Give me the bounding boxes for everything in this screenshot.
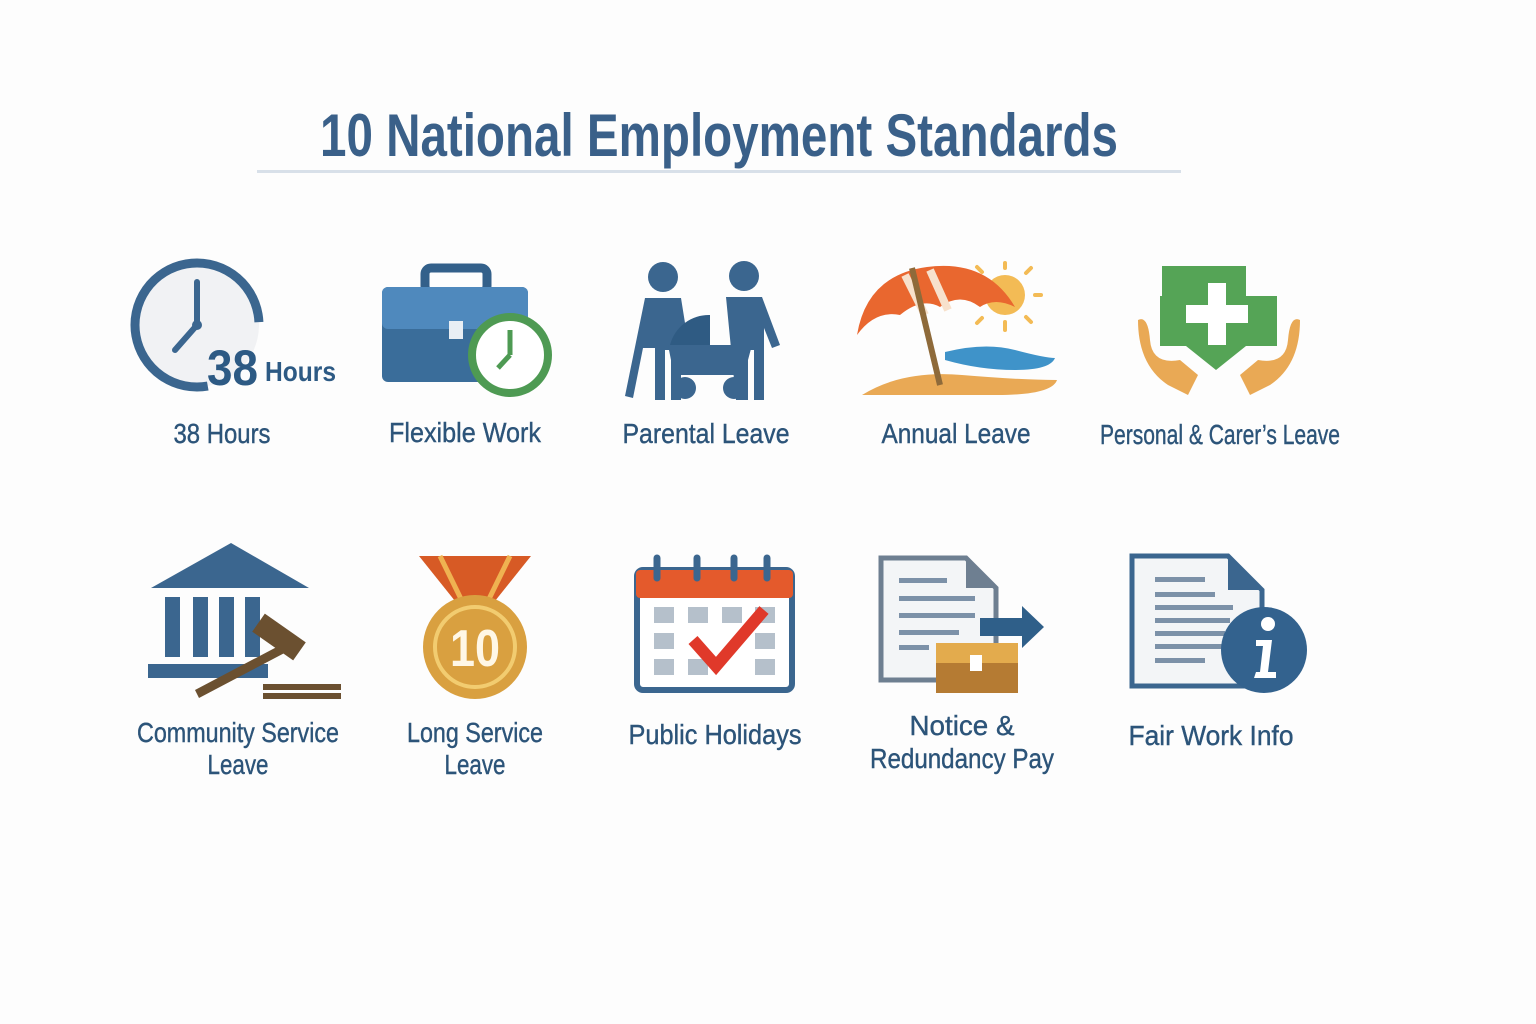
icon: hands with cross <box>1138 266 1300 395</box>
icon: medal: 10 <box>450 620 500 678</box>
icon: courthouse with gavel <box>148 543 341 699</box>
label: Parental Leave: Parental Leave <box>622 418 790 449</box>
label: Personal & Carer's Leave: Personal & Carer’s Leave <box>1100 419 1340 450</box>
title: 10 National Employment Standards <box>320 102 1118 169</box>
label: Public Holidays: Public Holidays <box>628 719 802 750</box>
label: Long Service Leave: Long Service <box>407 717 543 748</box>
text: Leave <box>208 749 268 780</box>
label: 38 Hours: 38 Hours <box>174 418 270 449</box>
icon: document with info <box>1132 556 1307 693</box>
label: Community Service Leave: Community Service <box>137 717 339 748</box>
icon: clock 38 hours <box>125 253 336 397</box>
label: Notice & Redundancy Pay: Notice & <box>910 710 1015 741</box>
icon: medal <box>419 556 531 699</box>
label: Fair Work Info: Fair Work Info <box>1128 720 1294 751</box>
icon: clock 38 hours: Hours <box>265 356 336 387</box>
icon: parents with pram <box>625 261 780 400</box>
icon: clock 38 hours: 38 <box>207 340 258 396</box>
text: Redundancy Pay <box>870 743 1054 774</box>
icon: briefcase with clock <box>382 268 548 393</box>
icon: beach umbrella <box>857 263 1057 395</box>
text: Leave <box>444 749 506 780</box>
label: Flexible Work: Flexible Work <box>389 417 542 448</box>
label: Annual Leave: Annual Leave <box>882 418 1030 449</box>
icon: calendar <box>636 558 793 690</box>
icon: notice document with box and arrow <box>881 558 1044 693</box>
